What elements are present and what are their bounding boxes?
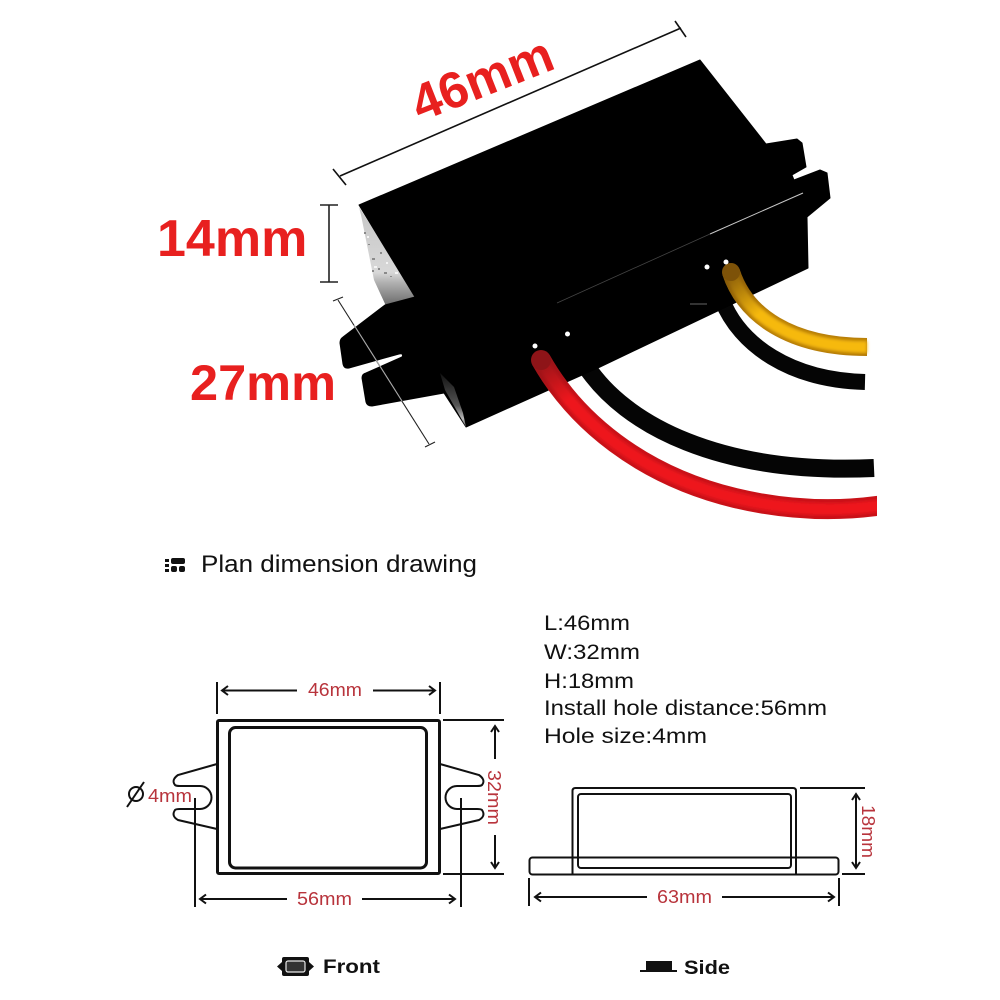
- icon: side view: [640, 961, 677, 972]
- icon: heading glyph: [165, 558, 185, 572]
- wire: yellow: [722, 263, 867, 347]
- specification text block: H:18mm: [544, 670, 634, 693]
- specification text block: L:46mm: [544, 612, 630, 635]
- caption: side: [640, 958, 730, 979]
- screw dots: [532, 260, 728, 348]
- side housing outline: [572, 788, 796, 874]
- right mounting tab: [440, 764, 483, 829]
- front inner outline: [230, 728, 426, 868]
- dimension: 63mm: [529, 878, 839, 907]
- product photo: converter module: [340, 60, 884, 509]
- steel lower wedge: [440, 373, 466, 427]
- dimension: 4mm hole: [127, 782, 192, 807]
- dimension line: 14mm height: [320, 205, 338, 282]
- dimension line: 27mm width: [333, 297, 435, 447]
- dimension: 32mm: [443, 720, 504, 874]
- housing body and mounting tabs: [340, 60, 830, 427]
- wire: black upper: [722, 300, 865, 382]
- front view drawing: [127, 680, 504, 909]
- label: 46mm: 46mm: [403, 25, 561, 132]
- steel end face: [359, 207, 418, 306]
- mould seam: [557, 193, 803, 304]
- caption: front: [277, 957, 381, 978]
- dimension line: 46mm length: [333, 21, 686, 185]
- specification text block: Hole size:4mm: [544, 725, 707, 748]
- dimension: 56mm: 56mm: [297, 889, 352, 909]
- wire: red: [531, 350, 884, 509]
- wire: black lower: [586, 366, 874, 469]
- front label: Front: [323, 957, 381, 978]
- side view drawing: [529, 788, 878, 907]
- dimension: 56mm: [195, 798, 461, 909]
- dimension: 63mm: 63mm: [657, 887, 712, 907]
- dimension: 32mm: 32mm: [484, 770, 504, 825]
- dimension: 18mm: 18mm: [858, 805, 878, 858]
- side label: Side: [684, 958, 730, 979]
- heading: plan dimension drawing: [165, 551, 477, 578]
- front housing outline: [218, 720, 440, 874]
- dimension: 18mm: [800, 788, 878, 874]
- specification text block: [544, 612, 827, 748]
- dimension: 46mm: [217, 680, 440, 714]
- heading text: Plan dimension drawing: [201, 551, 477, 578]
- dimension: 4mm hole: 4mm: [148, 786, 192, 806]
- left mounting tab: [174, 764, 217, 829]
- label: 27mm: 27mm: [190, 354, 336, 411]
- specification text block: Install hole distance:56mm: [544, 697, 827, 720]
- label: 14mm: 14mm: [157, 210, 307, 268]
- specification text block: W:32mm: [544, 641, 640, 664]
- icon: front view: [277, 957, 314, 976]
- side inner outline: [578, 794, 791, 868]
- dimension: 46mm: 46mm: [308, 680, 362, 700]
- side base plate: [530, 858, 838, 874]
